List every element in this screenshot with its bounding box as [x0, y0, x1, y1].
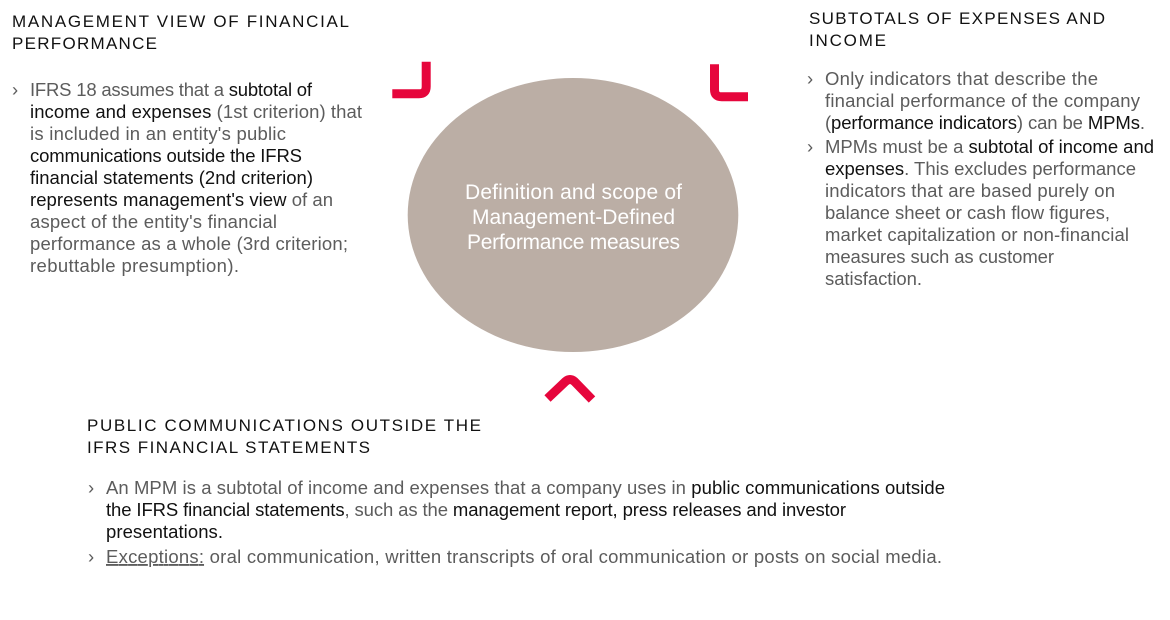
text block: subtotal bullet: measures such as customer	[825, 246, 1054, 267]
heading: management view: MANAGEMENT VIEW OF FINANCIAL	[12, 12, 349, 31]
text block: management view bullet: income and expenses (1st criterion) that	[30, 101, 362, 122]
ellipse background	[408, 78, 738, 352]
text block: subtotal bullet: expenses. This excludes performance	[825, 158, 1136, 179]
text block: management view bullet: financial statements (2nd criterion)	[30, 167, 313, 188]
text block: performance indicators bullet: (performance indicators) can be MPMs.	[825, 112, 1145, 133]
text block: management view bullet: rebuttable presumption).	[30, 255, 239, 276]
text block: management view bullet: represents management's view of an	[30, 189, 333, 210]
text block: subtotal bullet: MPMs must be a subtotal of income and	[825, 136, 1154, 157]
heading: management view	[12, 12, 349, 53]
heading: management view: PERFORMANCE	[12, 34, 157, 53]
text block: subtotal bullet	[807, 136, 1154, 289]
text block: performance indicators bullet: financial performance of the company	[825, 90, 1141, 111]
panel: public communications outside the IFRS financial statements	[87, 416, 945, 567]
text block: subtotal bullet: indicators that are based purely on	[825, 180, 1115, 201]
panel: subtotals of expenses and income	[807, 9, 1154, 289]
text block: subtotal bullet: balance sheet or cash flow figures,	[825, 202, 1110, 223]
arrow: top-right corner bracket	[714, 64, 748, 97]
text block: public communications bullet: ›	[88, 477, 94, 498]
text block: subtotal bullet: market capitalization or non-financial	[825, 224, 1129, 245]
text block: performance indicators bullet	[807, 68, 1145, 133]
text block: public communications bullet: An MPM is a subtotal of income and expenses that a company uses in public communications outside	[106, 477, 945, 498]
heading: public communications	[87, 416, 481, 457]
text block: exceptions bullet: ›	[88, 546, 94, 567]
text block: public communications bullet	[88, 477, 945, 542]
text block: public communications bullet: the IFRS financial statements, such as the management report, press releases and investor	[106, 499, 846, 520]
heading: subtotals: INCOME	[809, 31, 886, 50]
central ellipse with title	[408, 78, 738, 352]
text block: management view bullet: ›	[12, 79, 18, 100]
text block: management view bullet: is included in an entity's public	[30, 123, 286, 144]
heading: public communications: IFRS FINANCIAL STATEMENTS	[87, 438, 370, 457]
text block: subtotal bullet: ›	[807, 136, 813, 157]
heading: subtotals: SUBTOTALS OF EXPENSES AND	[809, 9, 1105, 28]
text block: management view bullet: IFRS 18 assumes that a subtotal of	[30, 79, 313, 100]
arrow: top-left corner bracket	[392, 62, 426, 94]
heading: subtotals	[809, 9, 1105, 50]
text block: management view bullet	[12, 79, 362, 276]
panel: management view of financial performance	[12, 12, 362, 276]
text block: management view bullet: performance as a whole (3rd criterion;	[30, 233, 348, 254]
text block: public communications bullet: presentations.	[106, 521, 223, 542]
title: definition and scope: Management-Defined	[472, 206, 675, 229]
heading: public communications: PUBLIC COMMUNICATIONS OUTSIDE THE	[87, 416, 481, 435]
text block: performance indicators bullet: ›	[807, 68, 813, 89]
text block: subtotal bullet: satisfaction.	[825, 268, 922, 289]
arrow: bottom chevron	[548, 380, 592, 400]
text block: management view bullet: aspect of the entity's financial	[30, 211, 277, 232]
title: definition and scope: Definition and scope of	[465, 181, 682, 204]
text block: exceptions bullet: Exceptions: oral communication, written transcripts of oral communication or posts on social media.	[106, 546, 942, 567]
title: definition and scope: Performance measures	[467, 231, 680, 254]
text block: management view bullet: communications outside the IFRS	[30, 145, 302, 166]
title: definition and scope	[465, 181, 682, 254]
text block: performance indicators bullet: Only indicators that describe the	[825, 68, 1098, 89]
